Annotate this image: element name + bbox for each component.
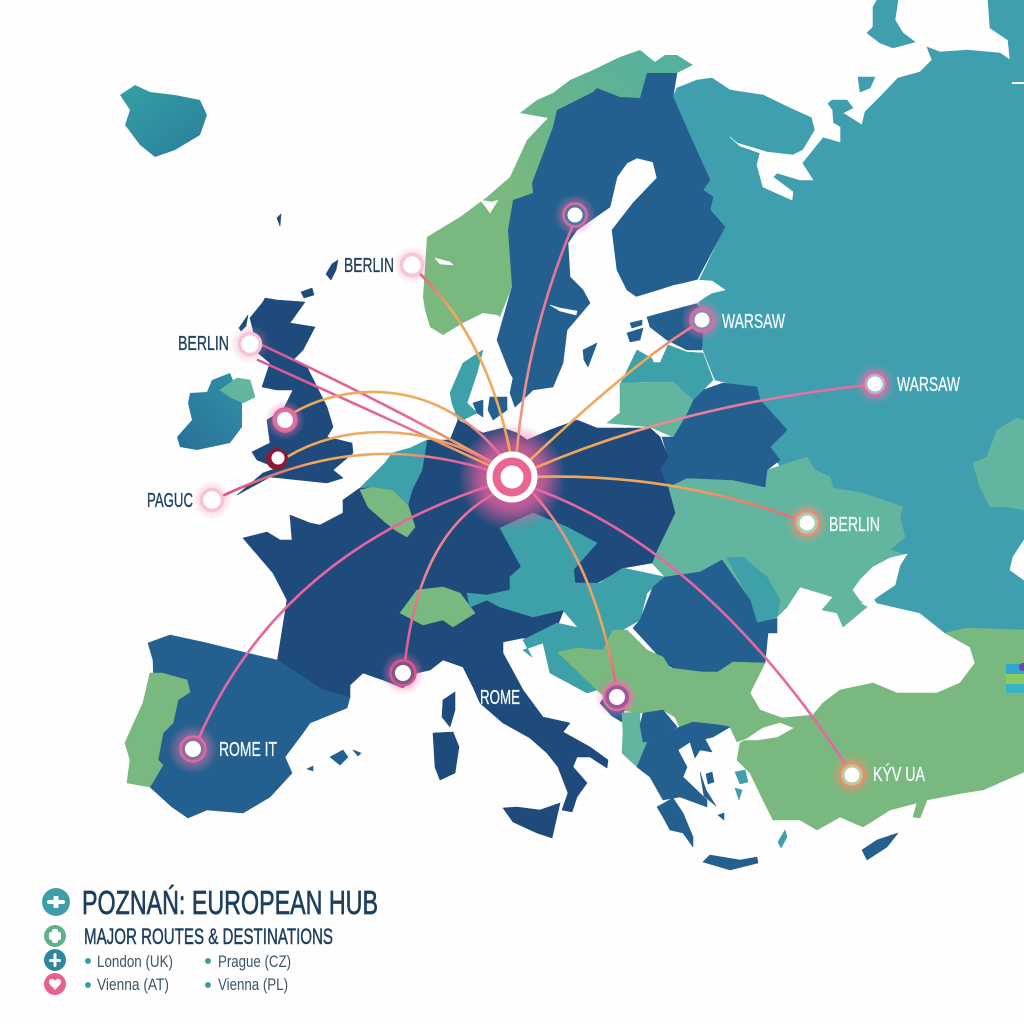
island: Sardinia (433, 732, 459, 780)
lake: Vänern (550, 305, 577, 315)
country: Moldova (727, 557, 780, 623)
country: Kazakhstan (973, 418, 1024, 510)
label: Rome IT: ROME IT (219, 739, 277, 761)
island: Novaya Zemlya (867, 0, 915, 48)
island: Chios (735, 788, 742, 800)
region: Peloponnese (657, 798, 693, 847)
node: Scotland (230, 324, 270, 364)
country: Romania (633, 560, 777, 673)
island: Sicily (503, 803, 560, 838)
island: Crete (703, 855, 758, 870)
label: Kyiv: KÝV UA (873, 763, 925, 786)
label: Rome: ROME (480, 687, 520, 709)
country: Lithuania (607, 382, 693, 437)
island: Euboea (700, 772, 716, 806)
label: Warsaw north: WARSAW (722, 311, 785, 333)
icon: plane badge (42, 888, 70, 916)
label: Pague: PAGUC (147, 490, 193, 512)
icon: blue plane badge (44, 949, 66, 971)
country: Ukraine (652, 457, 907, 627)
node: Turkey (830, 753, 874, 797)
map artifact (1006, 663, 1024, 693)
destination: Vienna AT: Vienna (AT) (97, 975, 169, 994)
country: Turkey and Caucasus (737, 628, 1024, 830)
node: Spain (168, 724, 218, 774)
node: Bosnia (595, 675, 639, 719)
route: Estonia node (528, 325, 695, 462)
country: North Macedonia (640, 710, 677, 742)
country: Switzerland (400, 587, 475, 627)
bullet dot (85, 982, 91, 988)
hub marker: Poznań (490, 454, 534, 500)
country: Belgium (360, 487, 415, 537)
country: Estonia (647, 303, 703, 350)
island: Kolguev (858, 77, 875, 92)
route lines (198, 225, 868, 768)
route: Norway node (418, 272, 512, 462)
island: Lesbos (735, 770, 748, 784)
island: Naxos (718, 813, 724, 820)
countries: Bosnia Serbia Bulgaria (558, 630, 782, 742)
bullet dot (205, 982, 211, 988)
route: Wales node (287, 432, 495, 465)
country: Albania (622, 712, 648, 767)
sea: Azov (853, 554, 907, 605)
country: Norway (423, 50, 693, 335)
country: Denmark (450, 350, 483, 420)
region: Northern Ireland (220, 378, 255, 403)
route: Sweden node (516, 225, 573, 462)
legend panel (42, 884, 378, 995)
glow: hub halo on land (458, 423, 566, 531)
island: Rhodes (778, 830, 787, 848)
fjord detail (480, 200, 498, 213)
island: Faroe (277, 214, 281, 226)
node: Sweden (554, 194, 596, 236)
island: Thassos (706, 772, 714, 784)
label: Warsaw east: WARSAW (897, 374, 960, 396)
island: Ibiza (307, 766, 313, 771)
icon: heart badge (44, 973, 66, 995)
node: Ukraine (785, 501, 829, 545)
sea: Gulf of Finland (625, 280, 725, 322)
island: Menorca (353, 750, 361, 756)
country: Great Britain (237, 298, 353, 495)
route: Spain node (198, 484, 495, 740)
country: Ireland (177, 373, 242, 450)
sea: White Sea (730, 98, 840, 200)
country: Latvia (620, 345, 713, 400)
route: Scotland upper (262, 345, 495, 464)
label: Berlin west: BERLIN (178, 333, 229, 355)
route: Nice node (405, 492, 498, 662)
sea: Caspian (1010, 540, 1024, 580)
fjord detail (435, 258, 453, 265)
island: Corsica (442, 692, 455, 727)
label: Berlin north: BERLIN (344, 255, 394, 277)
route: Cornwall node (220, 454, 495, 497)
country: Czechia (500, 513, 597, 570)
country: Netherlands (360, 440, 427, 505)
bullet dot (205, 958, 211, 964)
country: Greece mainland (637, 722, 730, 807)
island: Mallorca (330, 750, 348, 765)
country: Spain (148, 635, 350, 818)
icon: green badge (44, 925, 66, 947)
island: Cyprus (862, 833, 898, 860)
title: POZNAŃ: EUROPEAN HUB (82, 884, 378, 921)
country: Hungary (563, 568, 665, 637)
islands: Hebrides (239, 315, 248, 331)
label: Berlin east: BERLIN (829, 514, 880, 536)
route: Ukraine node (530, 477, 800, 520)
destination: Vienna PL: Vienna (PL) (218, 975, 288, 994)
country: Russia (673, 0, 1024, 633)
islands: Estonia (630, 320, 642, 328)
route: Bosnia node (530, 490, 616, 685)
destination: Prague: Prague (CZ) (218, 952, 291, 971)
island: Saaremaa (627, 328, 643, 342)
route: Scotland lower (258, 360, 495, 468)
country: Portugal (125, 673, 190, 787)
route: Manchester node (293, 392, 500, 455)
country: Montenegro (600, 690, 625, 722)
sea: Arctic gap (1012, 82, 1024, 84)
island: Gotland (583, 343, 597, 367)
node: Manchester (265, 400, 305, 440)
islands: Orkney (301, 288, 314, 298)
sea: Gulf of Riga (648, 344, 664, 362)
country: Iceland (120, 85, 207, 157)
country: Belarus (660, 383, 787, 487)
islands: Shetland (326, 260, 338, 280)
node: Norway (393, 246, 431, 284)
country: Croatia (523, 623, 625, 693)
countries: France Germany Poland Italy (243, 420, 675, 812)
island: Zealand (488, 397, 507, 420)
sea: Marmara (745, 723, 793, 740)
islands: Danish (473, 400, 483, 417)
country: Austria (467, 560, 575, 617)
route: Turkey node (530, 487, 848, 768)
node: Cornwall (192, 480, 232, 520)
node: Estonia (681, 299, 723, 341)
node: Nice (381, 651, 425, 695)
node: Russia (854, 363, 896, 405)
destination: London: London (UK) (97, 952, 173, 971)
route: Russia node (530, 385, 868, 470)
map of Europe (120, 0, 1024, 870)
bullet dot (85, 958, 91, 964)
subtitle: MAJOR ROUTES & DESTINATIONS (84, 924, 333, 949)
node: Wales (266, 448, 288, 470)
countries: Sweden and Finland (497, 73, 725, 407)
